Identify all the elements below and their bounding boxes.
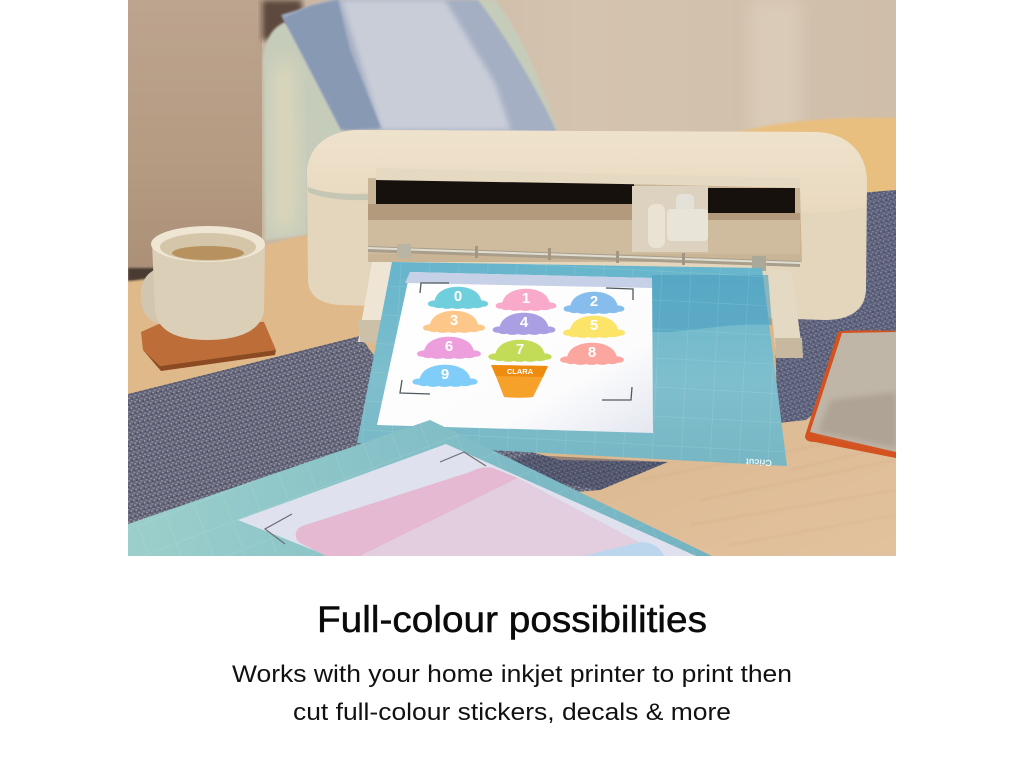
cutting mat 1: Cricut [746, 457, 772, 468]
mug handle [140, 270, 160, 324]
tablet [805, 330, 896, 458]
description text [232, 661, 792, 726]
title: Full-colour possibilities [317, 599, 707, 640]
ice cream scoops: 2 [590, 293, 598, 310]
table runner fabric [128, 190, 896, 530]
ice cream scoops: 1 [522, 290, 530, 307]
ice cream scoops: 6 [445, 338, 453, 355]
cutting machine body [307, 130, 867, 320]
coffee mug on coaster [141, 226, 276, 371]
ice cream cone [491, 365, 548, 398]
foreground printed sheet [238, 444, 696, 556]
background wall and chair [128, 0, 902, 290]
mug body [152, 243, 265, 340]
ice cream scoops: 4 [520, 314, 529, 331]
cutting mat 1 [357, 262, 787, 468]
ice cream scoops: 5 [590, 317, 598, 334]
guide rail [368, 249, 800, 264]
ice cream scoops: 8 [588, 344, 596, 361]
wooden coaster [141, 318, 276, 366]
ice cream scoops: 0 [454, 288, 462, 305]
ice cream scoops [412, 287, 625, 387]
printed sheet [377, 272, 653, 433]
chair back [263, 22, 345, 240]
machine opening [368, 178, 802, 262]
cutting mat 2 in foreground [128, 420, 712, 556]
table top [128, 118, 896, 556]
mat trays [358, 262, 803, 358]
photo: cutting machine on a table [128, 0, 902, 556]
tea [172, 246, 244, 260]
description text: Works with your home inkjet printer to print then [232, 661, 792, 688]
blanket [281, 0, 557, 132]
ice cream cone: CLARA [507, 367, 534, 376]
ice cream scoops: 3 [450, 312, 458, 329]
registration marks [400, 283, 633, 400]
carriage [632, 186, 708, 252]
ice cream scoops: 9 [441, 366, 449, 383]
ice cream scoops: 7 [516, 341, 524, 358]
description text: cut full-colour stickers, decals & more [293, 699, 731, 726]
